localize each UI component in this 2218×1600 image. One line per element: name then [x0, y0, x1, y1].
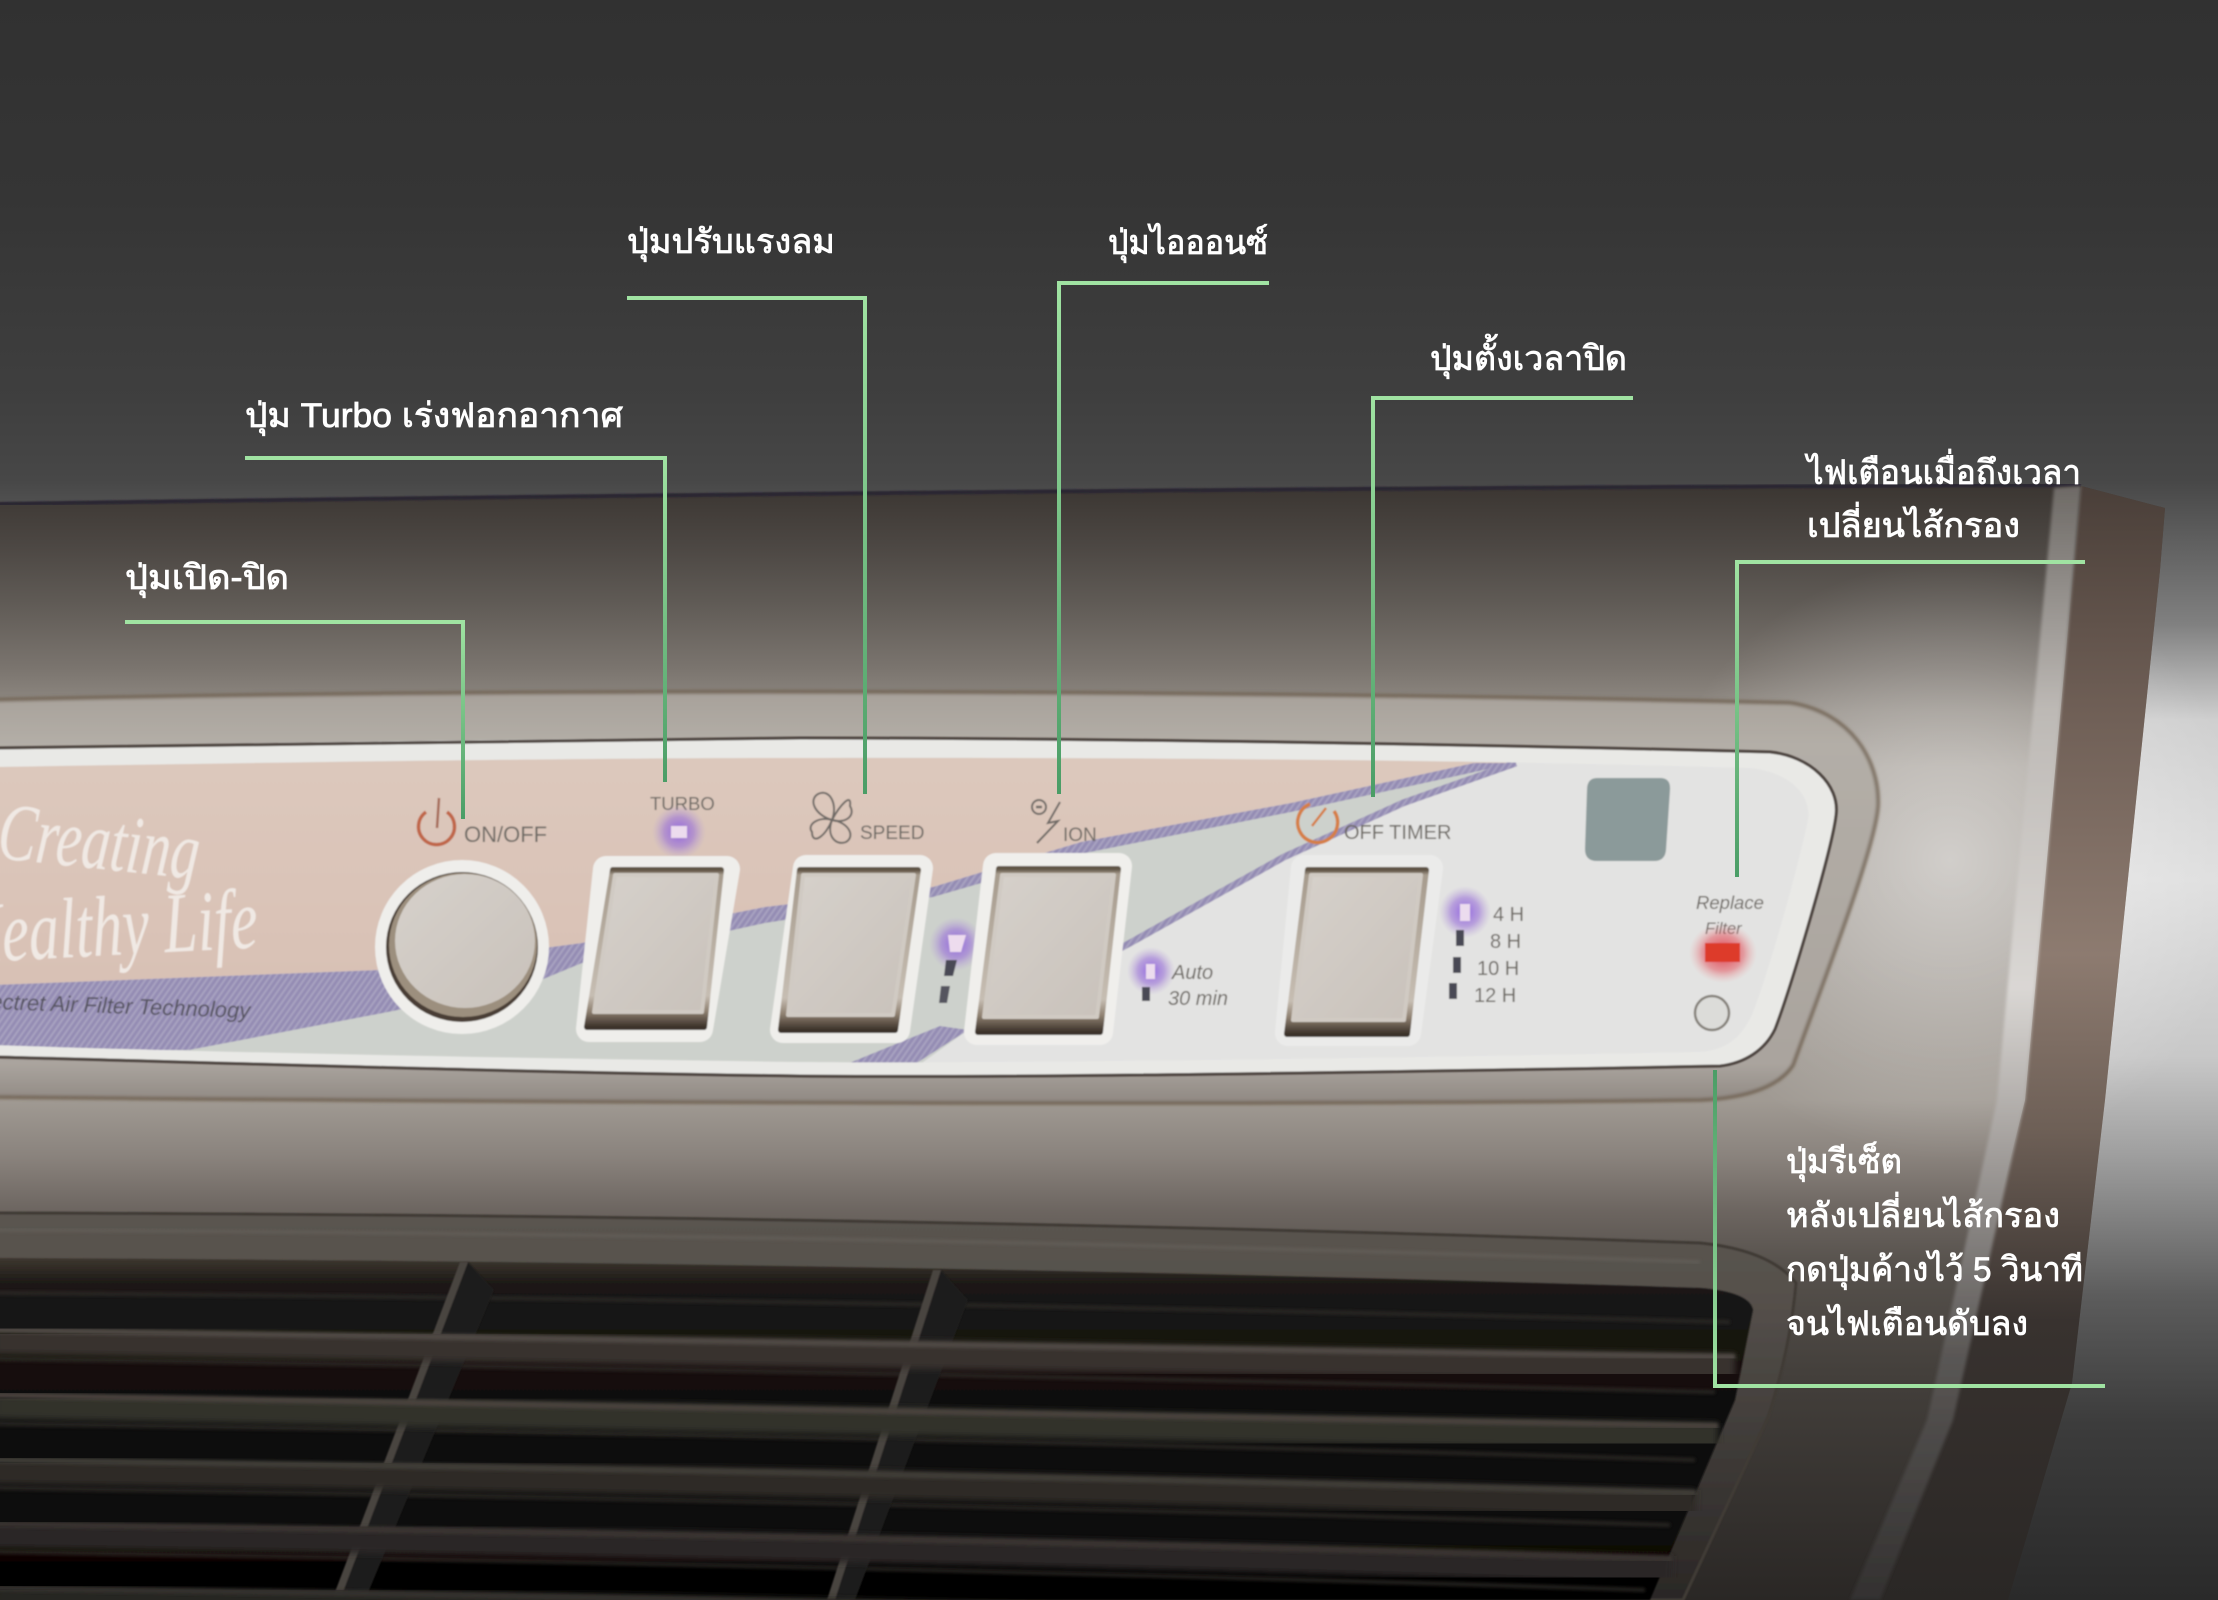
label: ION: ION: [1063, 825, 1097, 846]
label: timer hours: 10 H: [1477, 958, 1519, 980]
callout: filter reset button: หลังเปลี่ยนไส้กรอง: [1786, 1192, 2060, 1235]
right side wall: [1880, 486, 2165, 1600]
air grille: [0, 1213, 1796, 1600]
indicator: replace filter LED: [1689, 923, 1757, 983]
callout: filter reset button: [1713, 1070, 2105, 1388]
label: ion modes: 30 min: [1168, 988, 1228, 1010]
callout: replace filter warning light: เปลี่ยนไส้กรอง: [1807, 502, 2020, 545]
callout: off timer button: ปุ่มตั้งเวลาปิด: [1430, 334, 1627, 379]
icon: off timer: [1298, 804, 1338, 842]
button: ion: [977, 866, 1119, 1032]
label: timer hours: 12 H: [1474, 985, 1516, 1007]
callout: fan speed button: ปุ่มปรับแรงลม: [627, 223, 835, 262]
brand text: Creating Healthy Life: [0, 787, 260, 1023]
label: ion modes: [1168, 962, 1228, 1010]
callout: replace filter warning light: [1735, 449, 2085, 877]
callout: ion button: [1057, 223, 1269, 794]
control panel: [0, 738, 1845, 1076]
inner louver shadows: [0, 1293, 1730, 1590]
icon: fan: [811, 793, 852, 843]
callout: on/off button: ปุ่มเปิด-ปิด: [125, 559, 289, 598]
unit body shell: [0, 486, 2165, 1600]
button: on/off: [375, 860, 549, 1034]
callout: off timer button: [1371, 334, 1633, 797]
label: OFF TIMER: OFF TIMER: [1344, 822, 1451, 844]
callout: filter reset button: จนไฟเตือนดับลง: [1786, 1304, 2028, 1343]
white panel border: [0, 738, 1836, 1076]
indicator: timer LEDs: [1439, 886, 1491, 999]
callout: turbo button: [245, 397, 667, 782]
indicator: speed LEDs: [929, 917, 983, 1003]
label: Replace Filter: Replace: [1696, 892, 1764, 913]
button: turbo: [587, 869, 727, 1029]
horizontal louvers: [0, 1330, 1735, 1600]
label: SPEED: SPEED: [860, 823, 924, 844]
indicator: ion LEDs: [1127, 947, 1175, 1001]
purple hatched lower strip: [1122, 762, 1518, 952]
callout: turbo button: ปุ่ม Turbo เร่งฟอกอากาศ: [245, 397, 623, 436]
purple hatched lower corner: [852, 1026, 964, 1063]
brand text: Creating Healthy Life: Creating: [0, 787, 204, 898]
grille frame: [0, 1213, 1796, 1600]
icon: ion: [1032, 800, 1060, 843]
grille frame highlight: [0, 1230, 1700, 1262]
callout: ion button: ปุ่มไอออนซ์: [1108, 223, 1268, 263]
callout: fan speed button: [627, 223, 867, 794]
label: Replace Filter: Filter: [1705, 920, 1743, 938]
label: ON/OFF: ON/OFF: [464, 822, 547, 847]
button: filter reset: [1695, 996, 1729, 1030]
panel print area: [0, 758, 1518, 1064]
label: timer hours: [1474, 904, 1524, 1007]
icon: power: [418, 798, 454, 845]
callout: replace filter warning light: ไฟเตือนเมื่อถึงเวลา: [1804, 449, 2081, 492]
purple hatched band: [0, 763, 1516, 1050]
dark top edge line: [0, 485, 2081, 504]
pink print field: [0, 750, 1530, 985]
control panel recess: [0, 692, 1878, 1103]
body highlight on the right: [1650, 560, 2218, 1160]
callout: filter reset button: กดปุ่มค้างไว้ 5 วินาที: [1786, 1250, 2083, 1290]
label: TURBO: TURBO: [650, 793, 715, 814]
indicator: turbo LED: [652, 805, 706, 859]
label: timer hours: 4 H: [1493, 904, 1524, 926]
grey swoosh: [186, 770, 1484, 1062]
label: ion modes: Auto: [1171, 962, 1213, 984]
callout: filter reset button: ปุ่มรีเซ็ต: [1786, 1141, 1902, 1182]
button: speed: [781, 868, 920, 1030]
vertical dividers: [332, 1262, 968, 1600]
light side strip: [1850, 486, 2081, 1600]
label: Replace Filter: [1696, 892, 1764, 938]
callout: on/off button: [125, 559, 465, 819]
display window: [1585, 778, 1670, 861]
grille opening: [0, 1258, 1753, 1600]
label: timer hours: 8 H: [1490, 931, 1521, 953]
product photo: air purifier body: [0, 485, 2218, 1600]
button: off timer: [1287, 868, 1430, 1034]
